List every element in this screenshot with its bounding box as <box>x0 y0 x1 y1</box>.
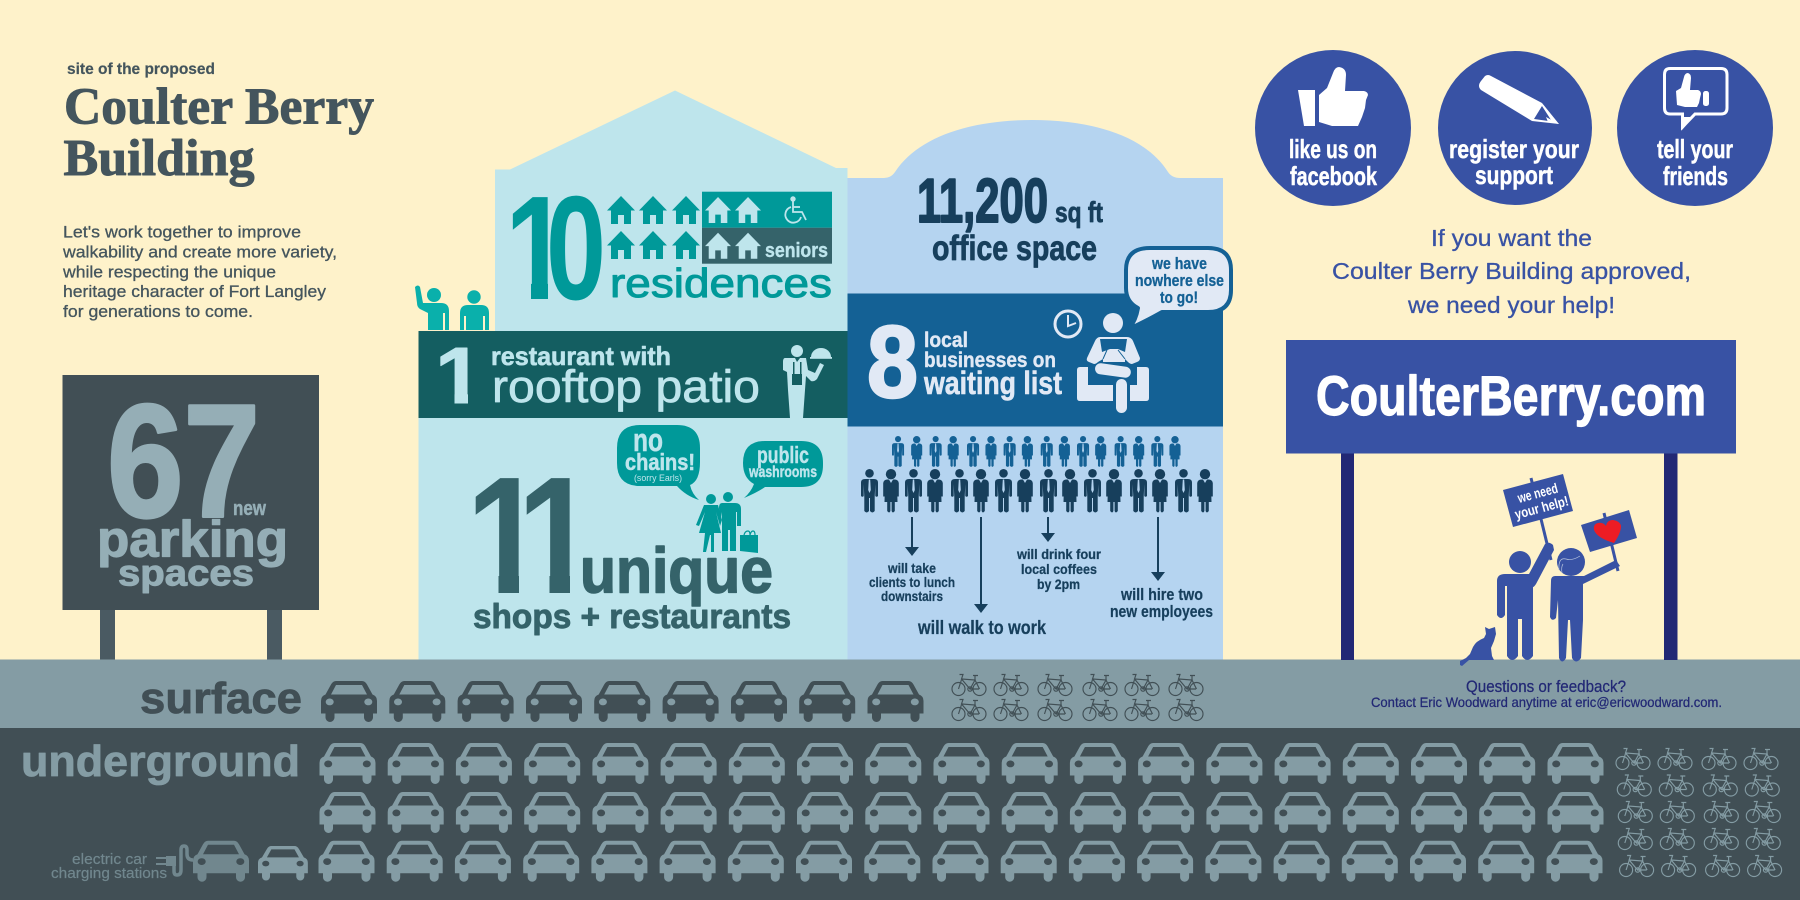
title block: site of the proposed <box>67 61 215 78</box>
call to action: tell friends: friends <box>1663 161 1728 191</box>
heading: 10 residences: 1 <box>505 166 569 331</box>
figure: woman <box>1550 548 1620 662</box>
call to action: register <box>1438 51 1592 205</box>
left building <box>415 90 848 660</box>
billboard: CoulterBerry.com <box>1316 364 1706 427</box>
sign: heart <box>1581 510 1637 571</box>
icon: thumbs up <box>1298 67 1368 126</box>
office space heading: sq ft <box>1055 197 1103 229</box>
underground bikes <box>1616 748 1782 876</box>
supporters with signs <box>1460 474 1637 666</box>
icon: houses <box>607 196 700 259</box>
surface band <box>0 660 1800 728</box>
icon: waiter <box>783 345 832 418</box>
speech bubble: nowhere else to go: to go! <box>1160 288 1198 307</box>
accessible units box <box>702 192 832 264</box>
shops block: shops + restaurants <box>473 598 791 636</box>
surface label: surface <box>140 674 302 723</box>
appeal text: Coulter Berry Building approved, <box>1332 258 1691 284</box>
right building: office <box>847 120 1223 660</box>
intro paragraph: for generations to come. <box>63 302 253 321</box>
intro paragraph: Let's work together to improve <box>63 222 301 242</box>
employee outcomes text: clients to lunch <box>869 574 955 590</box>
title block: Coulter Berry <box>64 78 374 136</box>
call to action: register: support <box>1475 160 1553 190</box>
speech bubble: public washrooms: public <box>757 442 809 468</box>
parking sign: 67 <box>107 372 260 552</box>
heading: 10 residences <box>505 166 832 331</box>
underground cars <box>258 743 1604 882</box>
heading: 10 residences: residences <box>610 260 832 306</box>
shops block: 1 <box>466 443 545 629</box>
intro paragraph <box>62 222 337 321</box>
parking sign: spaces <box>118 552 254 594</box>
employee outcomes text: downstairs <box>881 588 943 604</box>
restaurant band: rooftop patio <box>492 361 760 412</box>
parking sign: new <box>233 498 266 520</box>
icon: shoppers <box>696 492 758 553</box>
call to action: facebook: facebook <box>1290 161 1377 191</box>
icon: seated person <box>1077 313 1149 413</box>
icon: clock <box>1055 311 1081 337</box>
employee outcomes text: new employees <box>1110 602 1213 621</box>
electric car charging: charging stations <box>51 865 167 882</box>
speech bubble: public washrooms <box>743 441 823 498</box>
contact text: Questions or feedback? <box>1466 677 1626 696</box>
contact text: Contact Eric Woodward anytime at eric@ericwoodward.com. <box>1371 694 1722 710</box>
office space heading <box>917 167 1103 268</box>
restaurant band <box>418 331 848 420</box>
waiting list band: local <box>924 329 968 352</box>
shops block <box>466 422 823 636</box>
icon: speech bubble with thumb <box>1664 68 1727 130</box>
restaurant band: 1 <box>435 331 483 420</box>
employees row 2 <box>861 469 1213 512</box>
call to action: tell friends <box>1617 50 1773 206</box>
sign: we need your help <box>1503 474 1573 560</box>
speech bubble: nowhere else to go: we have <box>1151 254 1207 273</box>
underground label: underground <box>21 737 300 786</box>
speech bubble: no chains: chains! <box>625 449 695 475</box>
heading: 10 residences: 0 <box>546 166 606 331</box>
restaurant band: restaurant with <box>491 341 671 371</box>
waiting list band: 8 <box>867 305 918 419</box>
figure: cat <box>1460 627 1496 666</box>
parking sign <box>62 372 319 662</box>
speech bubble: public washrooms: washrooms <box>748 464 817 481</box>
underground band <box>0 728 1800 900</box>
figure: man <box>1497 543 1554 660</box>
employee outcomes text: will hire two <box>1120 585 1203 604</box>
electric car charging <box>51 841 249 882</box>
employee outcomes text <box>869 546 1213 639</box>
speech bubble: nowhere else to go: nowhere else <box>1135 271 1224 290</box>
call to action: facebook <box>1255 50 1411 206</box>
parking sign: parking <box>97 510 288 568</box>
title block <box>64 61 374 187</box>
icon: wheelchair <box>785 197 806 223</box>
employee outcomes text: will take <box>887 560 936 576</box>
employee outcomes text: local coffees <box>1021 561 1097 577</box>
office space heading: office space <box>932 229 1097 268</box>
icon: pencil <box>1479 75 1559 124</box>
speech bubble: no chains: (sorry Earls) <box>634 473 682 483</box>
speech bubble: no chains <box>617 422 700 500</box>
surface bikes <box>952 674 1203 720</box>
waiting list band: businesses on <box>924 349 1056 372</box>
call to action: facebook: like us on <box>1289 134 1377 164</box>
waiting list band <box>848 248 1231 426</box>
waiting list band: waiting list <box>923 365 1062 401</box>
employee outcomes text: will drink four <box>1016 546 1102 562</box>
employee outcomes text: by 2pm <box>1037 576 1080 592</box>
call to action: register: register your <box>1449 134 1579 164</box>
speech bubble: no chains: no <box>633 422 663 458</box>
appeal text: If you want the <box>1431 225 1592 251</box>
shops block: unique <box>580 535 773 607</box>
call to action: tell friends: tell your <box>1657 134 1733 164</box>
contact text <box>1371 677 1722 710</box>
intro paragraph: while respecting the unique <box>62 262 276 282</box>
speech bubble: nowhere else to go <box>1126 248 1231 329</box>
intro paragraph: heritage character of Fort Langley <box>63 282 326 301</box>
people on rooftop <box>415 286 489 330</box>
sign: we need your help: your help! <box>1513 492 1570 522</box>
sign: we need your help: we need <box>1515 480 1560 506</box>
employee outcomes text: will walk to work <box>917 618 1046 639</box>
accessible units box: seniors <box>765 240 828 262</box>
appeal text: we need your help! <box>1407 292 1615 318</box>
employees row 1 <box>892 436 1181 467</box>
office space heading: 11,200 <box>917 167 1048 236</box>
intro paragraph: walkability and create more variety, <box>62 242 337 262</box>
shops block: 1 <box>517 443 596 629</box>
title block: Building <box>64 130 255 187</box>
appeal text <box>1332 225 1691 318</box>
billboard <box>1286 340 1736 660</box>
surface cars <box>321 681 924 722</box>
electric car charging: electric car <box>72 851 147 868</box>
arrows <box>905 517 1165 613</box>
